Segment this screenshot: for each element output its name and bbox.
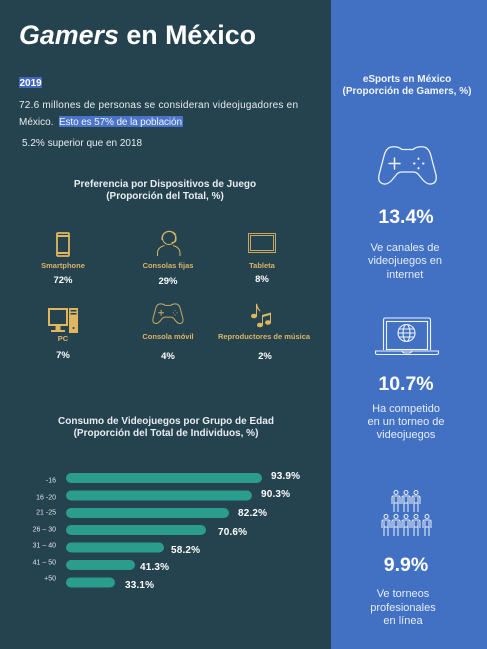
highlighted year: 2019 [20,78,42,89]
intro line 2: México. [19,117,53,128]
bar: +50: +50 [44,576,56,582]
value: 7% [56,350,70,361]
bar: 26-30: 70.6% [218,527,247,538]
bar: 31-40: 31 – 40 [33,542,56,550]
icon: music notes [251,304,271,327]
device: fixed consoles [143,231,193,287]
bar: 16-20: 90.3% [261,489,290,500]
bar: 21-25: 82.2% [238,508,267,519]
icon: smartphone [57,233,69,256]
description: en un torneo de [367,416,445,428]
value: 8% [255,274,269,285]
bar: 41-50: 41 – 50 [33,560,56,566]
heading: device preference: (Proporción del Total, %) [106,191,224,202]
heading: eSports: eSports en México [363,74,451,85]
icon: group of people [382,490,431,536]
bar: -16 [46,471,300,484]
bar: 41-50: 41.3% [140,562,169,573]
heading: device preference: Preferencia por Dispositivos de Juego [74,179,256,190]
bar: 41-50 [33,560,169,573]
bar: +50 [44,576,154,591]
label: Tableta [249,261,276,270]
intro line 2 [19,116,183,128]
panel: main background [0,0,331,649]
intro line 1: 72.6 millones de personas se consideran videojugadores en [19,100,298,111]
heading: consumption by age group [58,416,274,439]
value: 72% [53,275,73,286]
description [368,242,442,281]
bar: +50: 33.1% [125,580,154,591]
description [367,403,445,441]
description: videojuegos [377,429,436,441]
description [370,588,436,627]
bar: 21-25: 21 -25 [36,510,56,516]
description: en línea [383,615,423,627]
device preference grid [41,231,311,362]
device: PC [48,308,78,361]
icon: gamepad [153,304,183,324]
title: Gamers en México [19,20,256,50]
heading: eSports: (Proporción de Gamers, %) [343,86,471,97]
value: 2% [258,351,272,362]
label: Consola móvil [142,332,194,341]
value: 4% [161,351,175,362]
icon: game controller [379,147,436,184]
heading: consumption by age group: (Proporción del Total de Individuos, %) [74,428,258,439]
value: 9.9% [384,554,428,576]
description: videojuegos en [368,255,442,267]
label: Smartphone [41,261,85,270]
bar: 31-40: 58.2% [171,545,200,556]
bar chart: age groups [33,471,300,591]
heading: eSports [343,74,471,97]
bar: -16: -16 [46,478,56,484]
intro line 3: 5.2% superior que en 2018 [22,138,143,149]
icon: headset person [158,231,180,256]
bar: 26-30: 26 – 30 [33,526,56,534]
stat: competed in tournament [367,318,445,441]
device: mobile console [142,304,194,362]
bar: -16: 93.9% [271,471,300,482]
label: Reproductores de música [218,332,311,341]
bar: 16-20 [36,489,290,502]
value: 10.7% [378,373,434,395]
description: internet [387,269,423,281]
stat: watches pro tournaments [370,490,436,627]
bar: 31-40 [33,542,200,556]
label: Consolas fijas [143,261,193,270]
device: smartphone [41,233,85,286]
intro line 2: Esto es 57% de la población [59,117,182,128]
description: Ha competido [372,403,440,415]
bar: 21-25 [36,508,267,519]
icon: laptop with globe [376,318,438,354]
value: 29% [158,276,178,287]
label: PC [58,334,69,343]
device: music players [218,304,311,362]
heading: device preference [74,179,256,202]
device: tablet [248,234,276,285]
intro text block [19,77,298,149]
bar: 26-30 [33,525,247,538]
panel: eSports background [331,0,487,649]
description: profesionales [370,602,436,614]
value: 13.4% [378,206,434,228]
description: Ve canales de [370,242,440,254]
icon: tablet [248,234,276,252]
heading: consumption by age group: Consumo de Videojuegos por Grupo de Edad [58,416,274,427]
stat: watches channels [368,147,442,281]
bar: 16-20: 16 -20 [36,494,56,502]
description: Ve torneos [377,588,430,600]
icon: desktop computer [48,308,78,333]
